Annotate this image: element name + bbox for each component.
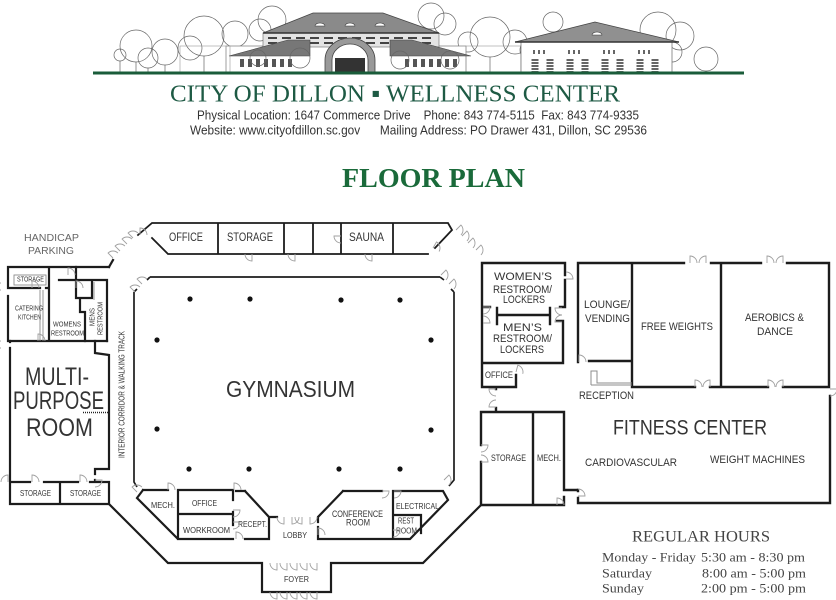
label: men's lockers: RESTROOM/ <box>493 333 553 345</box>
hours: monday to friday <box>602 550 805 564</box>
label: lobby: LOBBY <box>283 530 307 540</box>
label: reception: RECEPT. <box>238 519 267 529</box>
panel: fitness center <box>578 396 830 503</box>
hours: monday to friday: Monday - Friday <box>602 550 697 564</box>
illustration: building elevation with trees <box>93 3 744 74</box>
door swings <box>0 225 836 599</box>
label: rest room: ROOM <box>396 526 417 536</box>
hours: saturday: 8:00 am - 5:00 pm <box>702 566 806 580</box>
contact information: Website: www.cityofdillon.sc.gov Mailing Address: PO Drawer 431, Dillon, SC 29536 <box>190 124 647 138</box>
labels: multi-purpose wing rooms: MENS <box>88 308 96 326</box>
label: women's lockers: RESTROOM/ <box>493 284 553 296</box>
label: aerobics and dance: AEROBICS & <box>745 312 805 324</box>
label: men's lockers: LOCKERS <box>500 344 544 356</box>
label: aerobics and dance: DANCE <box>757 326 793 338</box>
label: lounge vending <box>584 299 631 325</box>
panel: upper office and sauna block <box>138 223 452 254</box>
panel: regular hours <box>602 528 806 596</box>
label: workroom: WORKROOM <box>183 525 230 535</box>
labels: multi-purpose wing rooms: RESTROOM <box>96 302 104 335</box>
labels: multi-purpose storage rooms: STORAGE <box>70 488 101 498</box>
panel: lounge, free weights and aerobics <box>578 263 829 402</box>
panel: gymnasium <box>134 277 454 487</box>
heading: regular hours: REGULAR HOURS <box>632 528 770 546</box>
labels: multi-purpose wing rooms: STORAGE <box>17 276 44 284</box>
panel: lower left office block <box>137 490 277 539</box>
label: lounge vending: LOUNGE/ <box>584 299 631 311</box>
label: weight machines: WEIGHT MACHINES <box>710 454 805 466</box>
label: mech: MECH. <box>537 453 561 463</box>
label: free weights: FREE WEIGHTS <box>641 321 713 333</box>
label: storage: STORAGE <box>491 453 526 463</box>
reception desk <box>591 371 632 385</box>
contact information: Physical Location: 1647 Commerce Drive Phone: 843 774-5115 Fax: 843 774-9335 <box>197 108 639 122</box>
hours: sunday: 2:00 pm - 5:00 pm <box>701 580 806 596</box>
labels: multi-purpose storage rooms: STORAGE <box>20 488 51 498</box>
heading: floor plan: FLOOR PLAN <box>342 163 526 193</box>
panel: locker rooms and office <box>482 263 565 387</box>
labels: multi-purpose wing rooms: RESTROOM <box>51 328 84 338</box>
label: multi-purpose room: ROOM <box>26 414 93 442</box>
label: handicap parking: PARKING <box>28 245 74 257</box>
label: fitness center: FITNESS CENTER <box>613 416 767 440</box>
hours: sunday <box>602 580 806 596</box>
label: rest room <box>396 516 417 536</box>
label: men's lockers: MEN’S <box>503 322 542 334</box>
label: electrical: ELECTRICAL <box>396 501 439 511</box>
labels: multi-purpose storage rooms <box>20 488 101 498</box>
label: foyer: FOYER <box>284 574 309 584</box>
label: aerobics and dance <box>745 312 805 338</box>
label: interior corridor and walking track: INTERIOR CORRIDOR & WALKING TRACK <box>118 330 126 458</box>
walls: main building outer corridor <box>109 504 481 592</box>
walls: multi-purpose wing <box>8 260 113 504</box>
label: women's lockers: LOCKERS <box>503 294 545 306</box>
label: reception: RECEPTION <box>579 390 634 402</box>
labels: multi-purpose wing rooms: CATERING <box>15 306 43 312</box>
label: handicap parking: HANDICAP <box>24 232 79 244</box>
label: men's lockers <box>493 322 553 356</box>
label: women's lockers <box>493 271 553 306</box>
label: gymnasium: GYMNASIUM <box>226 376 355 402</box>
label: sauna: SAUNA <box>349 232 384 244</box>
label: multi-purpose room: MULTI- <box>25 363 89 391</box>
labels: multi-purpose wing rooms: KITCHEN <box>18 314 41 322</box>
label: office: OFFICE <box>192 498 217 508</box>
label: women's lockers: WOMEN’S <box>494 271 552 283</box>
column dots <box>154 296 434 472</box>
label: conference room: ROOM <box>346 518 370 528</box>
label: multi-purpose room <box>13 363 109 442</box>
panel: storage and mechanical <box>481 388 577 505</box>
contact information <box>190 108 647 138</box>
label: office: OFFICE <box>169 232 203 244</box>
label: rest room: REST <box>398 516 414 526</box>
hours: monday to friday: 5:30 am - 8:30 pm <box>701 550 805 564</box>
label: multi-purpose room: PURPOSE <box>13 387 104 415</box>
label: mech: MECH. <box>151 500 175 510</box>
label: office: OFFICE <box>485 370 513 380</box>
hours: sunday: Sunday <box>602 580 645 596</box>
label: storage: STORAGE <box>227 232 273 244</box>
label: conference room <box>332 509 383 528</box>
label: handicap parking <box>24 232 79 257</box>
hours: saturday: Saturday <box>602 566 653 580</box>
label: lounge vending: VENDING <box>585 313 630 325</box>
label: cardiovascular: CARDIOVASCULAR <box>585 457 677 469</box>
labels: multi-purpose wing rooms <box>14 275 104 341</box>
label: conference room: CONFERENCE <box>332 509 383 519</box>
hours: saturday <box>602 566 806 580</box>
panel: lower right conference block <box>318 491 448 539</box>
labels: multi-purpose wing rooms: WOMENS <box>53 320 81 328</box>
title: CITY OF DILLON ▪ WELLNESS CENTER <box>170 80 621 108</box>
